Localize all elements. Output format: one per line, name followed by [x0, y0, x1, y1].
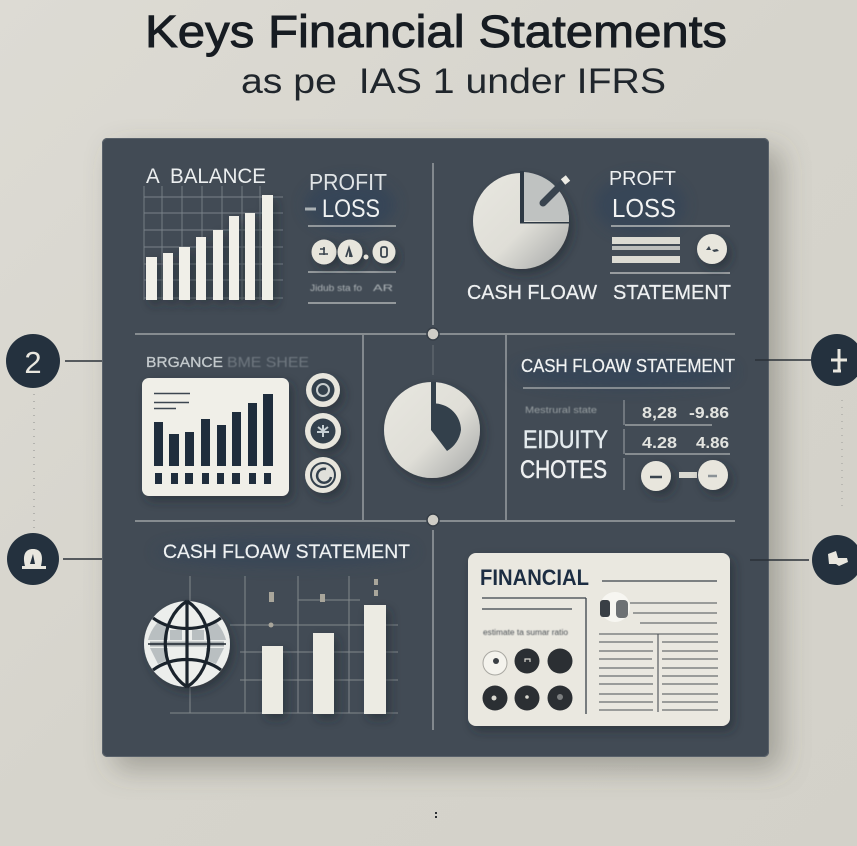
- heading: chotes: CHOTES: [520, 456, 607, 484]
- heading: balance sheet: [146, 354, 309, 371]
- values table: -9.86: [689, 405, 729, 422]
- icon: round button: [697, 234, 727, 264]
- heading: loss: LOSS: [322, 195, 380, 223]
- pie chart: [473, 171, 569, 269]
- bar chart: cash flow: [170, 576, 398, 714]
- heading: loss: LOSS: [612, 193, 676, 223]
- values table: 8,28: [642, 405, 677, 422]
- icons: three round buttons: [312, 240, 396, 264]
- icons: three ring buttons: [305, 373, 341, 493]
- heading: cash floaw statement: CASH FLOAW STATEMENT: [521, 356, 735, 376]
- heading: financial: FINANCIAL: [480, 565, 589, 590]
- icons: six round buttons: [482, 648, 572, 710]
- small caption text: [310, 283, 394, 293]
- heading: cash floaw: CASH FLOAW: [467, 282, 597, 304]
- heading: statement: STATEMENT: [613, 282, 731, 304]
- small caption text: AR: [373, 283, 394, 293]
- bar chart: balance: [144, 186, 283, 300]
- badge: left upper: [6, 334, 102, 388]
- panel: cash flow with globe: [144, 542, 410, 714]
- footer mark: [435, 812, 437, 819]
- values table: 4.86: [696, 435, 729, 452]
- panel: profit loss top right: [609, 168, 730, 273]
- badge: left upper: 2: [24, 345, 42, 380]
- panel: financial document card: [468, 553, 730, 726]
- heading: proft: PROFT: [609, 168, 676, 190]
- values table: [642, 405, 729, 452]
- badge: left lower: [7, 533, 102, 585]
- panel: pie chart top right: [467, 171, 731, 304]
- panel: cash flow statement middle: [520, 356, 735, 491]
- heading: eiduity: EIDUITY: [523, 426, 608, 454]
- heading: cash floaw statement: CASH FLOAW STATEMENT: [163, 542, 410, 563]
- icon: document emblem: [600, 592, 630, 622]
- slider control: [641, 460, 728, 491]
- panel: balance top left: [144, 165, 283, 300]
- dotted connector right: [841, 400, 843, 510]
- node: center bottom: [427, 514, 439, 526]
- heading: balance sheet: BRGANCE: [146, 354, 223, 371]
- badge: right lower: [750, 535, 857, 585]
- small caption text: Jidub sta fo: [310, 283, 362, 293]
- chart card: [142, 378, 289, 496]
- blurred caption: estimate ta sumar ratio: [483, 628, 569, 637]
- title: Keys Financial Statements: [145, 6, 727, 57]
- heading: profit: PROFIT: [309, 169, 387, 195]
- dotted connector left: [33, 394, 35, 528]
- text lines and table: [599, 603, 718, 712]
- donut chart: [384, 382, 480, 478]
- panel: balance sheet middle: [142, 354, 341, 496]
- heading: a balance: A BALANCE: [146, 165, 266, 188]
- dashboard panel: [102, 138, 769, 757]
- heading: balance sheet: BME SHEE: [227, 354, 309, 371]
- icon: globe: [144, 601, 230, 687]
- bars: horizontal: [612, 237, 680, 263]
- node: center top: [427, 328, 439, 340]
- panel: profit loss top left: [305, 169, 396, 303]
- subtitle: as pe IAS 1 under IFRS: [241, 62, 666, 101]
- blurred caption: Mestrural state: [525, 405, 597, 415]
- badge: right upper: [755, 334, 857, 386]
- values table: 4.28: [642, 435, 677, 452]
